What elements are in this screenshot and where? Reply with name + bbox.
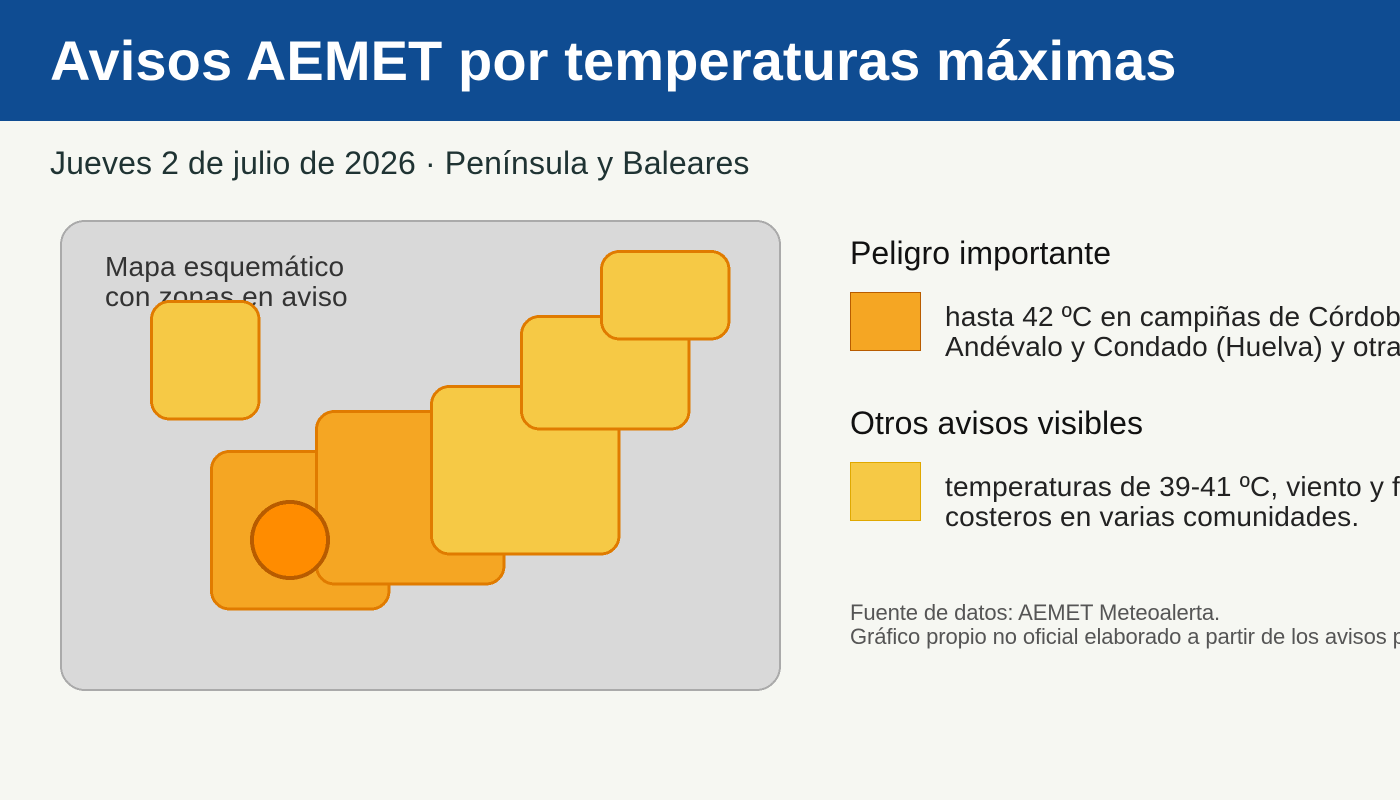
legend: important danger [850, 235, 1400, 362]
map background [61, 221, 780, 690]
marker: hottest point [252, 502, 328, 578]
legend swatch: orange [850, 292, 920, 350]
zone: northwest warning [152, 302, 259, 419]
zone: central warning [432, 386, 619, 554]
legend heading: Peligro importante [850, 235, 1111, 271]
zone: northeast warning [522, 316, 689, 429]
map label: Mapa esquemático [105, 251, 344, 282]
legend: other warnings [850, 405, 1400, 532]
zone: southwest important danger [212, 452, 389, 609]
zone: far northeast warning [602, 252, 729, 339]
legend text: costeros en varias comunidades. [945, 501, 1359, 532]
source note: Fuente de datos: AEMET Meteoalerta. [850, 600, 1220, 625]
map label: con zonas en aviso [105, 281, 348, 312]
subtitle: Jueves 2 de julio de 2026 · Península y Baleares [50, 145, 750, 181]
zone: south central important danger [316, 412, 504, 584]
panel: schematic map [61, 221, 780, 690]
header band [0, 0, 1400, 121]
legend heading: Otros avisos visibles [850, 405, 1143, 441]
title: Avisos AEMET por temperaturas máximas [50, 29, 1177, 92]
legend swatch: yellow [850, 462, 920, 520]
